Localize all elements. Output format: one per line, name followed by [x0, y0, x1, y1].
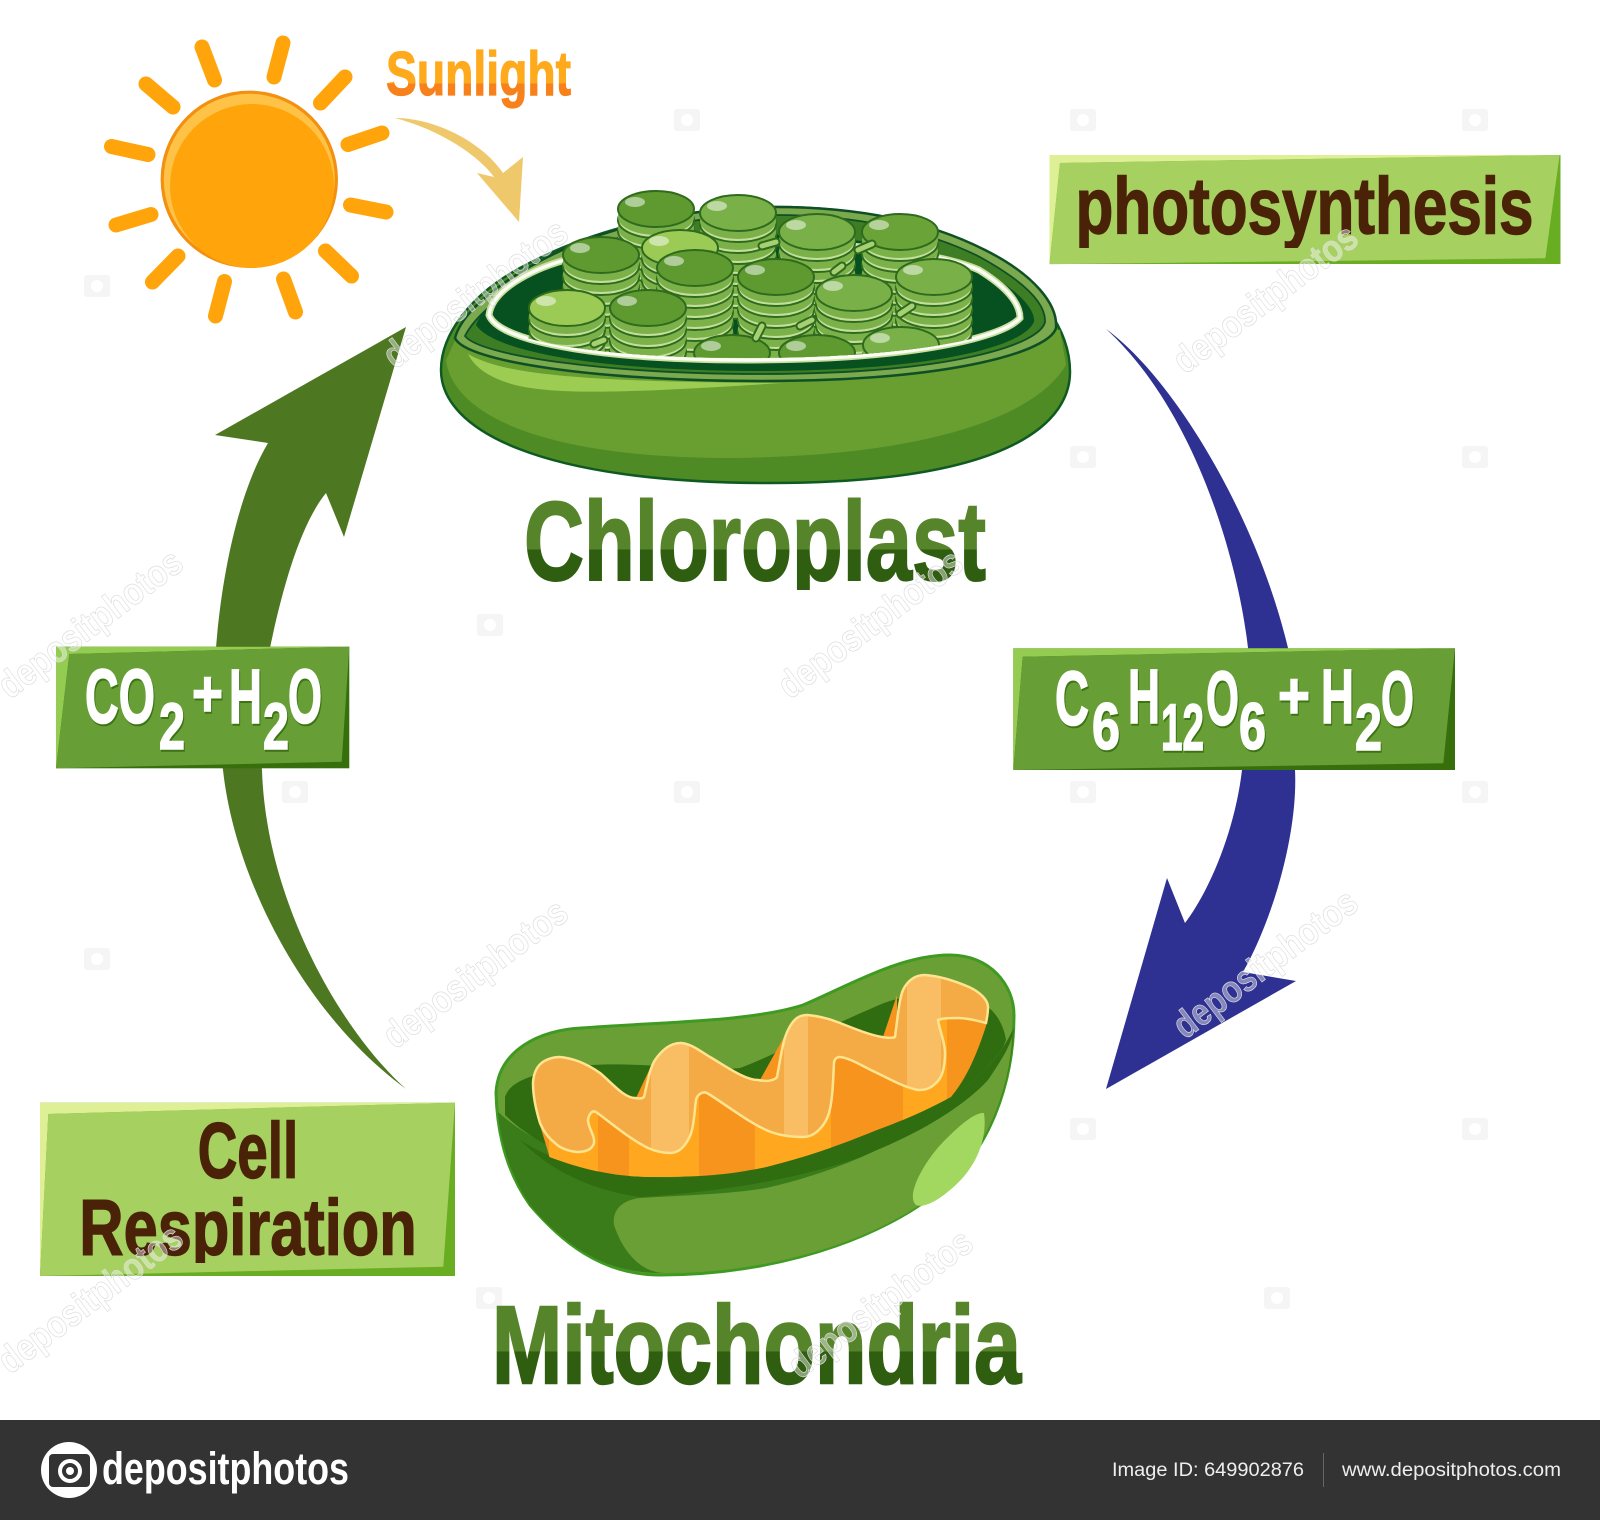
chloroplast highlight streak — [468, 354, 782, 392]
chloroplast illustration — [441, 191, 1070, 483]
formula text: O — [288, 654, 322, 740]
panel: glucose + water label — [1013, 648, 1455, 770]
sun disc — [161, 91, 338, 268]
chloroplast white ring line — [489, 242, 1020, 360]
arrow: CO2 and water to chloroplast (green) — [215, 327, 406, 1089]
label text line one: Cell — [198, 1105, 298, 1194]
diagonal watermarks: depositphotos — [780, 1221, 981, 1387]
label shadow edge — [56, 647, 349, 768]
chloroplast outer body — [441, 207, 1070, 483]
cristae orange matrix — [540, 995, 986, 1177]
formula text: + — [192, 656, 223, 730]
formula text — [85, 654, 322, 763]
panel: CO2 + H2O label — [56, 647, 349, 768]
label face — [56, 647, 349, 768]
chloroplast inner membrane — [465, 215, 1045, 374]
formula text: 12 — [1161, 690, 1204, 764]
formula text: O — [1381, 656, 1414, 742]
diagonal watermarks: depositphotos — [375, 891, 576, 1057]
formula text: H — [1321, 654, 1354, 740]
label highlight edge — [1013, 648, 1455, 770]
logo wordmark: depositphotos — [102, 1443, 349, 1494]
mitochondrion inner cavity — [505, 994, 1006, 1180]
mitochondrion light panel — [614, 1037, 1012, 1273]
mitochondria illustration — [496, 955, 1014, 1275]
formula text: H — [229, 654, 262, 740]
chloroplast inner ring — [489, 242, 1020, 360]
formula text: C — [1055, 656, 1089, 742]
faint watermark camera marks — [84, 109, 1488, 1309]
label text line two: Respiration — [79, 1182, 417, 1271]
mitochondrion highlight — [913, 1113, 985, 1206]
image id: Image ID: 649902876 — [1112, 1460, 1304, 1481]
panel: cell respiration label — [40, 1103, 455, 1276]
mitochondrion front wall — [498, 1027, 1014, 1273]
formula text: CO — [85, 654, 155, 740]
label face — [1013, 648, 1455, 770]
sun rays — [112, 43, 386, 316]
website url: www.depositphotos.com — [1341, 1460, 1561, 1481]
formula text: 6 — [1092, 689, 1120, 763]
diagonal watermarks: depositphotos — [1165, 216, 1366, 382]
formula text: 2 — [263, 689, 289, 763]
formula text: 2 — [159, 689, 185, 763]
arrow: glucose to mitochondria (blue) — [1106, 329, 1296, 1089]
sunlight label: Sunlight — [386, 40, 571, 109]
formula text: 2 — [1355, 690, 1382, 764]
chloroplast heading: Chloroplast — [524, 479, 986, 604]
mitochondrion dark wall lip — [520, 1030, 1013, 1197]
label highlight edge — [56, 647, 349, 768]
label shadow edge — [1013, 648, 1455, 770]
chloroplast rim — [455, 207, 1056, 381]
mitochondrion outer body — [496, 955, 1014, 1275]
formula text: + — [1278, 658, 1310, 732]
formula text — [1055, 654, 1414, 764]
chloroplast lighter body — [446, 330, 1066, 458]
diagonal watermarks: depositphotos — [770, 541, 971, 707]
label shadow edge — [40, 1103, 455, 1276]
icon: sun — [112, 43, 386, 316]
chloroplast dark cavity band — [476, 234, 1034, 371]
icon: camera logo — [41, 1442, 97, 1498]
cristae wavy membrane — [525, 970, 995, 1160]
formula text: H — [1128, 654, 1160, 740]
footer bar — [0, 1420, 1600, 1520]
footer background — [0, 1420, 1600, 1520]
footer divider — [1323, 1453, 1324, 1487]
mitochondria heading: Mitochondria — [492, 1284, 1022, 1407]
label face — [1050, 155, 1560, 264]
formula text: O — [1206, 656, 1239, 742]
label highlight edge — [40, 1103, 455, 1276]
label face — [40, 1103, 455, 1276]
grana stacks — [528, 190, 973, 358]
arrow: sunlight to chloroplast — [395, 118, 523, 222]
diagonal watermarks — [0, 211, 1366, 1387]
label highlight edge — [1050, 155, 1560, 264]
panel: photosynthesis label — [1050, 155, 1560, 264]
formula text: 6 — [1239, 689, 1266, 763]
diagonal watermarks: depositphotos — [375, 211, 576, 377]
diagonal watermarks: depositphotos — [1165, 881, 1366, 1047]
label shadow edge — [1050, 155, 1560, 264]
